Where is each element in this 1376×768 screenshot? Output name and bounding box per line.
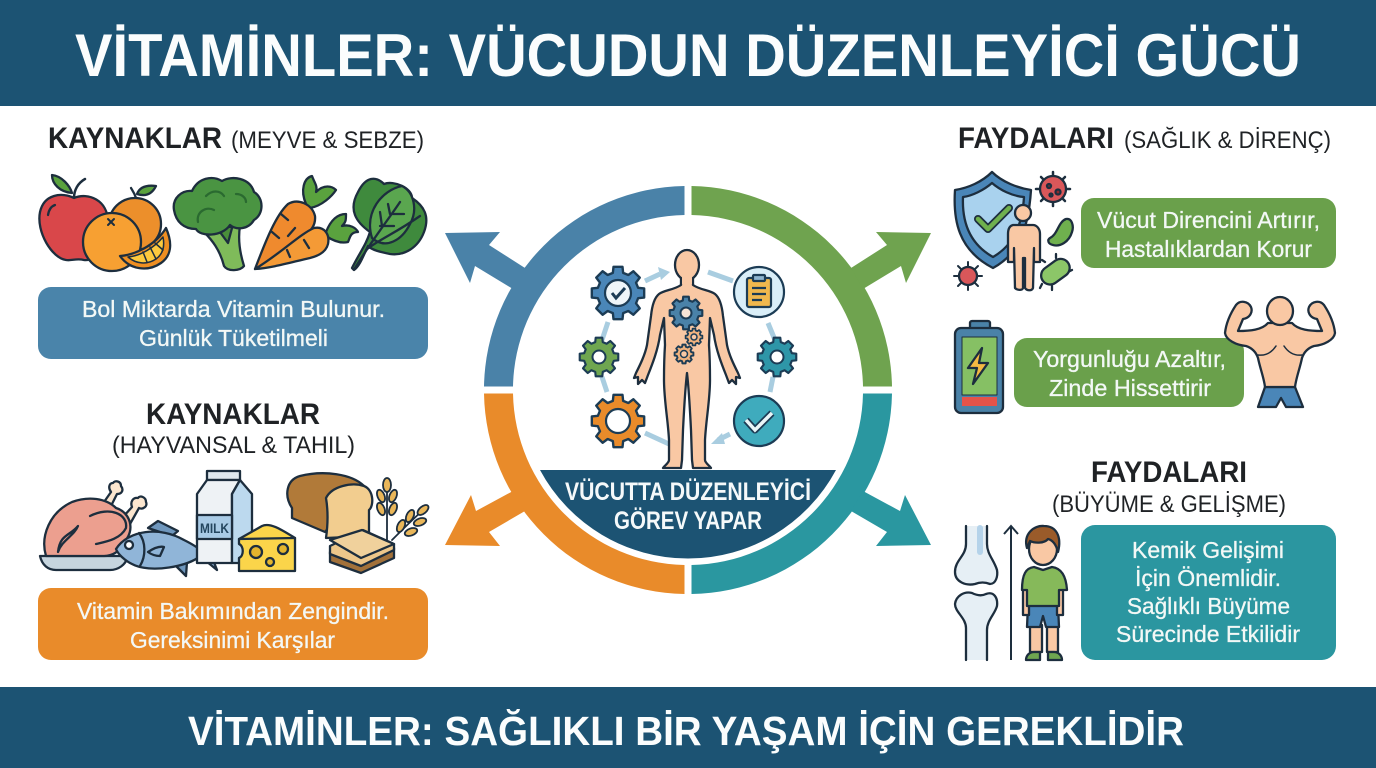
arrow: teal segment and arrow [692,394,931,594]
footer banner: VİTAMİNLER: SAĞLIKLI BİR YAŞAM İÇİN GEREKLİDİR [188,708,1184,754]
icon: roast chicken on plate [40,481,146,570]
heading: faydalari saglik direnc [958,122,1331,155]
icon: bread slices [330,530,394,573]
callout: energy benefit [1014,338,1244,407]
icon: large virus [1036,172,1070,206]
cycle connector arrows [602,267,775,444]
icon: bean bacteria [1048,219,1073,245]
callout: blue source box: Günlük Tüketilmeli [139,325,328,351]
arrow: orange segment and arrow [445,394,684,594]
icon: carrots [255,176,358,269]
icon: wheat stalks [375,478,430,540]
icon: boy [1022,526,1067,660]
heading: kaynaklar hayvansal tahil: (HAYVANSAL & TAHIL) [112,432,355,459]
callout: growth benefit: Sürecinde Etkilidir [1116,621,1300,647]
callout: blue source box [38,287,428,359]
center label panel: VÜCUTTA DÜZENLEYİCİ [565,477,811,506]
heading: faydalari buyume gelisme [1052,456,1286,518]
arrow: growth arrow [1004,526,1018,660]
callout: growth benefit: Kemik Gelişimi [1132,537,1284,563]
icon: orange gear [592,395,644,447]
callout: orange source box: Vitamin Bakımından Zengindir. [77,598,389,624]
callout: growth benefit: Sağlıklı Büyüme [1127,593,1290,619]
arrow: blue segment and arrow [445,186,684,386]
icon: cheese [239,525,295,571]
icon: teal gear [758,338,796,376]
footer banner [0,687,1376,768]
callout: growth benefit [1081,525,1336,660]
icon: shield [955,172,1031,268]
heading: faydalari buyume gelisme: (BÜYÜME & GELİŞME) [1052,491,1286,518]
icon: small virus [954,262,982,290]
callout: immunity benefit: Hastalıklardan Korur [1105,236,1312,262]
icons: fruit and vegetables [39,175,426,271]
callout: orange source box: Gereksinimi Karşılar [130,627,335,653]
icon: person [1008,205,1040,290]
icon: bread loaf [287,473,372,538]
icon: blue gear with check [592,267,644,319]
icon: spinach leaves [352,179,426,270]
callout: blue source box: Bol Miktarda Vitamin Bulunur. [82,296,385,322]
callout: growth benefit: İçin Önemlidir. [1135,565,1281,591]
icon: apple [39,175,108,260]
icon: fish [116,521,217,576]
callout: immunity benefit: Vücut Direncini Artırır, [1097,207,1320,233]
icon: clipboard circle [734,267,784,317]
heading: kaynaklar meyve sebze: KAYNAKLAR [48,122,222,155]
gears inside body [670,297,702,363]
center label panel [540,470,836,559]
icon: oranges [83,186,170,271]
icon: broccoli [174,178,262,270]
icon: rod bacteria [1038,254,1073,290]
arrow: green segment and arrow [692,186,931,386]
callout: energy benefit: Zinde Hissettirir [1049,375,1211,401]
icon: green gear [580,338,618,376]
icon: muscular man [1225,297,1335,407]
icon: milk carton [197,471,252,563]
heading: kaynaklar hayvansal tahil [112,398,355,459]
icon: battery [955,321,1003,413]
icon: milk carton: MILK [200,520,229,536]
heading: kaynaklar meyve sebze [48,122,424,155]
heading: faydalari buyume gelisme: FAYDALARI [1091,456,1247,489]
center label panel: GÖREV YAPAR [614,506,762,535]
callout: orange source box [38,588,428,660]
title banner [0,0,1376,106]
icon: shield, person and germs [954,172,1073,290]
icon: knee bones [955,526,997,660]
icon: check circle [734,396,784,446]
central ring with arrows [445,186,931,594]
icon: human body [634,250,740,468]
heading: kaynaklar hayvansal tahil: KAYNAKLAR [146,398,320,431]
title banner: VİTAMİNLER: VÜCUDUN DÜZENLEYİCİ GÜCÜ [75,22,1301,89]
icons: animal foods and grains [40,471,430,576]
callout: energy benefit: Yorgunluğu Azaltır, [1033,346,1226,372]
callout: immunity benefit [1081,198,1336,268]
heading: faydalari saglik direnc: (SAĞLIK & DİRENÇ) [1124,127,1331,154]
heading: faydalari saglik direnc: FAYDALARI [958,122,1114,155]
heading: kaynaklar meyve sebze: (MEYVE & SEBZE) [231,127,424,154]
